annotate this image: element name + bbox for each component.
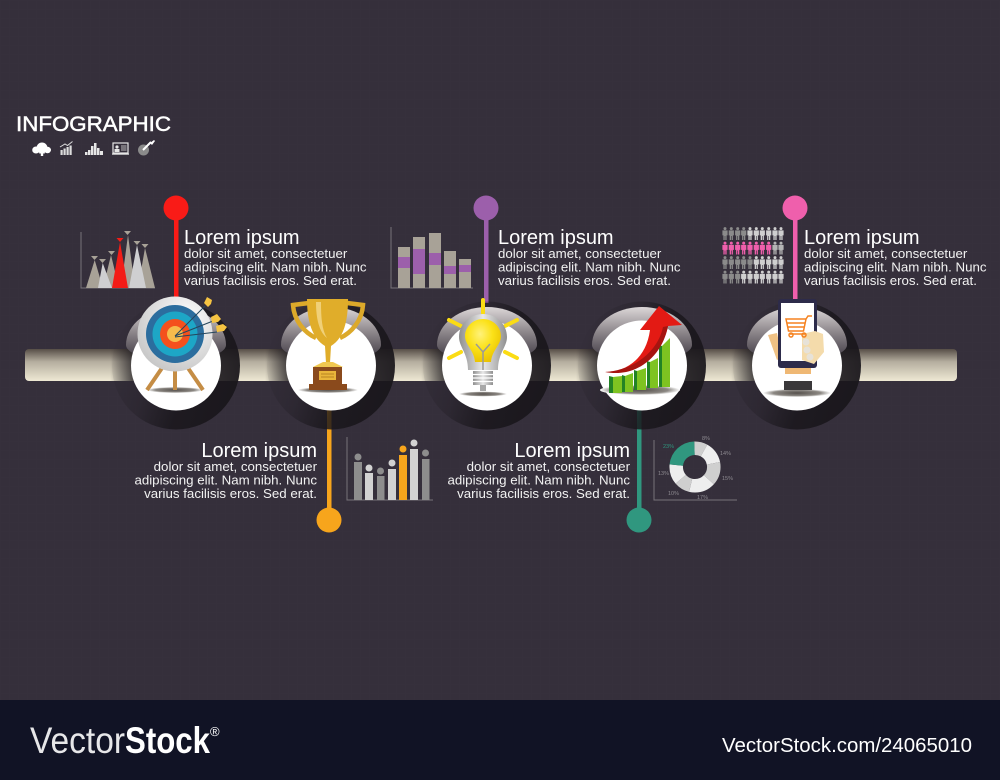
node base 4 [576,302,706,430]
icon: cloud upload [32,142,51,156]
text block 1: Lorem ipsum [184,227,300,249]
text block 1: varius facilisis eros. Sed erat. [184,273,357,288]
text block 4: adipiscing elit. Nam nibh. Nunc [447,472,630,488]
chart: donut: 23% [663,444,674,450]
timeline bar [25,349,957,381]
text block 2: Lorem ipsum [201,440,317,462]
text block 5 [804,227,987,288]
text block 4: dolor sit amet, consectetuer [467,459,631,474]
text block 3: varius facilisis eros. Sed erat. [498,273,671,288]
text block 3: adipiscing elit. Nam nibh. Nunc [498,260,681,274]
icon: growth arrow over bars [600,306,682,395]
text block 2: adipiscing elit. Nam nibh. Nunc [134,472,317,488]
chart: donut: 17% [697,495,708,501]
node base 5 [731,302,861,430]
chart: donut: 15% [722,476,733,482]
row 2 [722,242,784,254]
text block 4: varius facilisis eros. Sed erat. [457,486,630,501]
chart: donut [654,436,737,501]
text block 1: adipiscing elit. Nam nibh. Nunc [184,260,367,274]
pin line and dot: purple [474,196,498,303]
chart: donut: 14% [720,451,731,457]
text block 5: adipiscing elit. Nam nibh. Nunc [804,260,987,274]
pin line and dot: green [626,405,652,532]
text block 1: dolor sit amet, consectetuer [184,246,348,261]
text block 2 [134,440,318,501]
row 3 [722,256,784,269]
chart: bars with dots [347,437,433,500]
icon: bar graph [85,143,103,155]
footer logo: Stock [125,720,210,761]
chart: donut: 10% [668,491,679,497]
footer logo [30,720,220,761]
chart: triangle peaks [81,231,155,288]
chart: donut: 8% [702,436,710,442]
node base 3 [421,302,551,430]
icon: phone in hand with cart [763,299,831,397]
icon: trophy [293,299,363,393]
title icon row [32,140,155,156]
footer logo: Vector [30,720,125,761]
text block 4 [447,440,631,501]
footer band [0,700,1000,780]
text block 4: Lorem ipsum [514,440,630,462]
chart: stacked bars [391,227,473,288]
icon: dart on target [138,140,155,156]
footer id: VectorStock.com/24065010 [722,735,972,757]
icon: shopping cart [786,316,812,337]
text block 2: varius facilisis eros. Sed erat. [144,486,317,501]
row 1 [722,227,784,240]
node base 1 [110,302,240,430]
footer logo: ® [210,724,220,739]
text block 5: varius facilisis eros. Sed erat. [804,273,977,288]
chart: people pictogram [722,227,784,284]
pin line and dot: orange [316,405,342,532]
text block 5: dolor sit amet, consectetuer [804,246,968,261]
icon: id card [112,143,129,155]
pin line and dot: red [164,196,188,300]
chart: donut: 13% [658,471,669,477]
text block 1 [184,227,367,288]
icon: light bulb [449,300,517,396]
icon: archery target [138,296,227,393]
text block 3 [498,227,681,288]
text block 5: Lorem ipsum [804,227,920,249]
node base 2 [265,302,395,430]
text block 2: dolor sit amet, consectetuer [154,459,318,474]
row 4 [722,271,784,284]
text block 3: dolor sit amet, consectetuer [498,246,662,261]
text block 3: Lorem ipsum [498,227,614,249]
icon: rising chart [60,142,72,155]
title: INFOGRAPHIC [16,113,171,136]
pin line and dot: pink [782,196,808,303]
